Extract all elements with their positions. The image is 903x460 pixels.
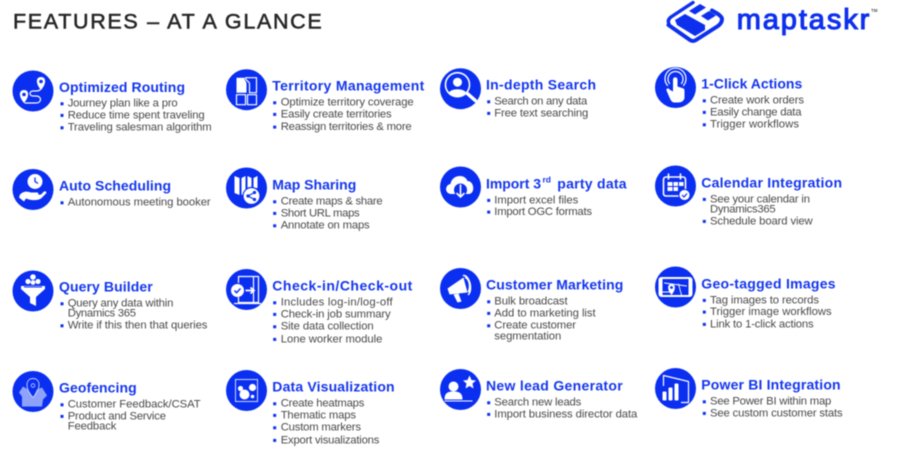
- icon: bubble window: [226, 370, 267, 411]
- feature list: Trigger workflows: [710, 119, 799, 131]
- feature list: Dynamics 365: [68, 308, 136, 320]
- feature list: [703, 95, 804, 131]
- heading: Query Builder: [59, 279, 153, 295]
- panel: Customer Marketing: [440, 268, 623, 342]
- icon: calendar with check: [655, 166, 696, 206]
- icon: cloud download: [440, 166, 481, 208]
- feature list: See custom customer stats: [710, 407, 843, 419]
- heading: Calendar Integration: [701, 174, 842, 190]
- icon: person magnifier: [440, 68, 481, 109]
- feature list: Import excel files: [494, 194, 579, 206]
- feature list: [703, 193, 814, 227]
- feature list: Includes log-in/log-off: [281, 297, 394, 309]
- panel: Map Sharing: [226, 168, 383, 232]
- feature list: Search on any data: [494, 96, 588, 108]
- icon: door with check: [226, 269, 267, 310]
- icon: geofence pin on region: [12, 371, 54, 412]
- title: FEATURES – AT A GLANCE: [13, 10, 322, 34]
- panel: Geofencing: [12, 371, 201, 433]
- feature list: Custom markers: [281, 422, 361, 434]
- feature list: Search new leads: [494, 397, 582, 409]
- feature list: Easily create territories: [281, 108, 392, 120]
- icon: hand with clock: [12, 169, 54, 210]
- heading: party data: [557, 175, 627, 191]
- panel: 1-Click Actions: [655, 67, 804, 131]
- feature list: Query any data within: [68, 298, 173, 310]
- heading: New lead Generator: [486, 377, 623, 393]
- feature list: Traveling salesman algorithm: [68, 122, 212, 134]
- feature list: Thematic maps: [281, 409, 356, 421]
- icon: funnel: [12, 270, 54, 312]
- feature list: [273, 297, 394, 345]
- icon: tapping finger: [655, 67, 696, 108]
- panel: Optimized Routing: [12, 70, 212, 134]
- icon: person with star: [440, 369, 481, 410]
- icon: phone with geotag: [655, 266, 696, 308]
- feature list: [703, 396, 843, 419]
- feature list: Schedule board view: [710, 215, 814, 227]
- heading: Map Sharing: [272, 176, 356, 192]
- heading: Auto Scheduling: [59, 177, 171, 193]
- feature list: [273, 196, 383, 232]
- feature list: Feedback: [68, 421, 117, 433]
- panel: Power BI Integration: [655, 368, 843, 419]
- feature list: Add to marketing list: [494, 307, 596, 319]
- feature list: Free text searching: [494, 107, 588, 119]
- logo: maptaskr: [668, 2, 878, 41]
- heading: Territory Management: [272, 78, 425, 94]
- panel: Geo-tagged Images: [655, 266, 836, 330]
- feature list: [487, 397, 638, 420]
- feature list: [60, 98, 212, 134]
- heading: Customer Marketing: [486, 276, 623, 292]
- feature list: Optimize territory coverage: [281, 97, 414, 109]
- heading: Geo-tagged Images: [701, 275, 836, 291]
- feature list: Dynamics365: [710, 203, 776, 215]
- panel: New lead Generator: [440, 369, 638, 420]
- feature list: Easily change data: [710, 106, 802, 118]
- feature list: Reassign territories & more: [281, 121, 412, 133]
- heading: 1-Click Actions: [701, 75, 803, 91]
- feature list: Link to 1-click actions: [710, 318, 814, 330]
- feature list: Annotate on maps: [281, 220, 370, 232]
- feature list: Journey plan like a pro: [68, 98, 178, 110]
- heading: In-depth Search: [486, 76, 596, 92]
- heading: rd: [542, 175, 551, 185]
- feature list: Short URL maps: [281, 207, 360, 219]
- feature list: Check-in job summary: [281, 308, 391, 320]
- feature list: [487, 296, 596, 342]
- feature list: Trigger image workflows: [710, 306, 832, 318]
- icon: route pins: [12, 70, 54, 112]
- icon: megaphone: [440, 268, 481, 309]
- feature list: See Power BI within map: [710, 396, 831, 408]
- icon: folded map with share: [226, 168, 267, 208]
- feature list: [273, 97, 414, 133]
- panel: Import 3rd party data: [440, 166, 627, 218]
- feature list: Customer Feedback/CSAT: [68, 399, 201, 411]
- feature list: Product and Service: [68, 410, 166, 422]
- heading: Optimized Routing: [59, 79, 185, 95]
- heading: Power BI Integration: [701, 376, 841, 392]
- feature list: See your calendar in: [710, 193, 810, 205]
- panel: Territory Management: [226, 69, 425, 133]
- panel: Query Builder: [12, 270, 208, 332]
- feature list: Lone worker module: [281, 333, 382, 345]
- feature list: segmentation: [494, 330, 561, 342]
- panel: Calendar Integration: [655, 166, 842, 227]
- panel: In-depth Search: [440, 68, 596, 119]
- heading: Check-in/Check-out: [272, 277, 413, 293]
- feature list: [60, 298, 208, 332]
- panel: Auto Scheduling: [12, 169, 211, 210]
- icon: territory map: [226, 69, 267, 110]
- feature list: Create maps & share: [281, 196, 383, 208]
- panel: Check-in/Check-out: [226, 269, 413, 345]
- icon: logo isometric box: [668, 2, 722, 41]
- heading: Geofencing: [59, 380, 137, 396]
- heading: Data Visualization: [272, 379, 395, 395]
- feature list: Autonomous meeting booker: [68, 197, 211, 209]
- feature list: Reduce time spent traveling: [68, 109, 205, 121]
- icon: Power BI chart: [655, 368, 696, 409]
- feature list: Site data collection: [281, 321, 374, 333]
- feature list: [703, 294, 832, 330]
- feature list: Export visualizations: [281, 434, 380, 446]
- feature list: Import OGC formats: [494, 206, 592, 218]
- feature list: Write if this then that queries: [68, 320, 208, 332]
- feature list: [273, 398, 380, 446]
- feature list: [487, 96, 588, 119]
- feature list: [60, 399, 201, 433]
- feature list: Bulk broadcast: [494, 296, 568, 308]
- feature list: Create heatmaps: [281, 398, 365, 410]
- heading: Import 3: [486, 175, 541, 191]
- panel: Data Visualization: [226, 370, 395, 446]
- trademark: TM: [871, 8, 878, 13]
- feature list: Tag images to records: [710, 294, 819, 306]
- feature list: Import business director data: [494, 408, 638, 420]
- feature list: [487, 194, 592, 218]
- logo wordmark: maptaskr: [737, 4, 870, 36]
- feature list: Create customer: [494, 320, 576, 332]
- feature list: Create work orders: [710, 95, 804, 107]
- heading: [486, 175, 627, 191]
